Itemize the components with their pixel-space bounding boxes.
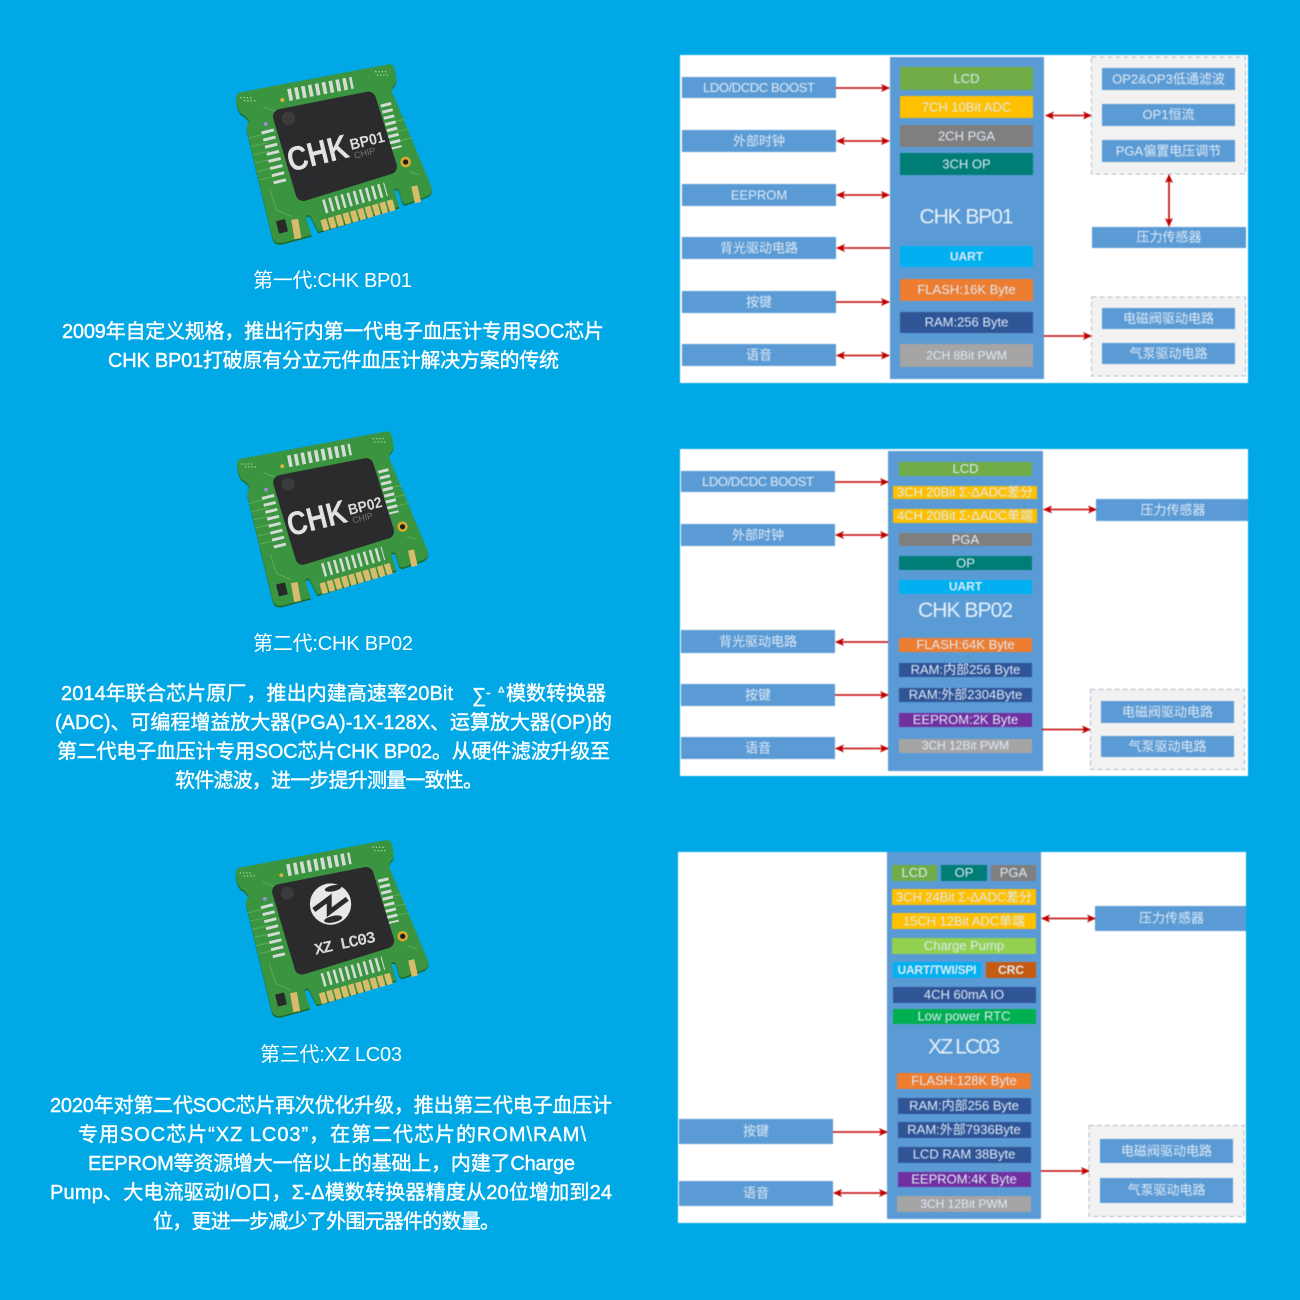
box: pump driver: 气泵驱动电路 — [1128, 739, 1207, 754]
box: pressure sensor — [1095, 906, 1246, 931]
box: valve driver — [1102, 308, 1235, 329]
block: EEPROM: EEPROM:4K Byte — [911, 1172, 1017, 1186]
block: LCD — [899, 461, 1032, 476]
box: pressure sensor — [1092, 227, 1246, 248]
left peripheral: external clock: 外部时钟 — [732, 528, 784, 542]
box: pump driver — [1102, 343, 1235, 364]
left peripheral: keys: 按键 — [746, 294, 772, 310]
icon: CHK BP02 chip — [237, 431, 428, 607]
left peripheral: LDO/DCDC BOOST: LDO/DCDC BOOST — [703, 80, 815, 95]
block: UART/TWI/SPI: UART/TWI/SPI — [898, 963, 976, 977]
text block: generation two description: ∑ — [472, 685, 486, 707]
heading: generation one: 第一代:CHK BP01 — [253, 269, 412, 292]
left peripheral: voice: 语音 — [743, 1186, 769, 1200]
heading: generation three: 第三代:XZ LC03 — [260, 1043, 402, 1066]
block: LCD — [900, 67, 1033, 90]
box: pump driver: 气泵驱动电路 — [1129, 346, 1208, 361]
left peripheral: backlight driver — [682, 237, 836, 259]
text block: generation three description: 2020年对第二代SOC芯片再次优化升级，推出第三代电子血压计 — [50, 1094, 612, 1117]
left peripheral: voice — [682, 344, 836, 366]
left peripheral: keys — [679, 1119, 833, 1144]
left peripheral: backlight driver: 背光驱动电路 — [719, 634, 797, 649]
box: pressure sensor — [1096, 499, 1248, 521]
box: pressure sensor: 压力传感器 — [1139, 910, 1204, 926]
block: PGA: 2CH PGA — [938, 128, 995, 144]
icon: CHK BP02 chip: CHIP — [351, 511, 374, 525]
left peripheral: EEPROM — [682, 184, 836, 206]
text block: generation one description: CHK BP01打破原有分立元件血压计解决方案的传统 — [108, 349, 559, 372]
box: valve driver: 电磁阀驱动电路 — [1122, 704, 1213, 720]
block: external RAM: RAM:外部7936Byte — [907, 1122, 1021, 1137]
chip name: CHK BP01 — [920, 206, 1014, 228]
box: valve driver — [1100, 1139, 1233, 1163]
left peripheral: keys: 按键 — [745, 688, 771, 702]
box: pressure sensor: 压力传感器 — [1140, 502, 1206, 518]
block: IO: 4CH 60mA IO — [924, 987, 1004, 1002]
diagram: XZ LC03 block diagram — [678, 852, 1246, 1223]
box: PGA bias: PGA偏置电压调节 — [1116, 144, 1221, 158]
left peripheral: keys — [681, 684, 835, 706]
box: pressure sensor: 压力传感器 — [1136, 230, 1202, 244]
arrows: left connections — [835, 482, 889, 748]
block: PWM — [900, 344, 1033, 367]
left peripheral: external clock — [682, 130, 836, 152]
block: LCD: LCD — [952, 461, 979, 476]
box: pump driver — [1101, 736, 1234, 757]
text block: generation two description: 2014年联合芯片原厂，推出内建高速率20Bit — [61, 682, 453, 705]
block: RAM: RAM:256 Byte — [925, 314, 1008, 330]
left peripheral: keys — [682, 291, 836, 313]
text block: generation two description: 软件滤波，进一步提升测量一致性。 — [175, 769, 483, 792]
chip name: XZ LC03 — [928, 1036, 1000, 1058]
panel: third generation — [50, 840, 1246, 1233]
left peripheral: backlight driver: 背光驱动电路 — [720, 240, 798, 256]
arrows: left connections — [836, 88, 890, 356]
block: UART: UART — [950, 250, 984, 264]
panel: second generation — [55, 431, 1248, 792]
block: charge pump: Charge Pump — [924, 938, 1004, 953]
icon: CHK BP01 chip: BP01 — [348, 129, 387, 154]
block: PGA — [899, 532, 1032, 547]
text block: generation two description — [55, 682, 612, 792]
group: actuators — [1089, 1126, 1244, 1216]
block: RTC — [893, 1008, 1036, 1024]
block: PWM: 3CH 12Bit PWM — [922, 738, 1009, 752]
block: differential ADC: 3CH 24Bit Σ-ΔADC差分 — [896, 890, 1032, 904]
block: PGA: PGA — [952, 532, 980, 547]
block: PWM — [899, 738, 1032, 753]
box: pump driver: 气泵驱动电路 — [1127, 1182, 1206, 1198]
panel: SoC core — [887, 852, 1041, 1219]
block: PWM: 3CH 12Bit PWM — [920, 1197, 1008, 1211]
block: OP: 3CH OP — [942, 156, 991, 172]
text block: generation one description: 2009年自定义规格，推出行内第一代电子血压计专用SOC芯片 — [62, 320, 604, 343]
block: single-ended ADC: 15CH 12Bit ADC单端 — [903, 914, 1025, 928]
left peripheral: LDO/DCDC BOOST — [681, 471, 835, 492]
icon: CHK BP01 chip: CHIP — [353, 146, 376, 161]
box: constant current: OP1恒流 — [1142, 107, 1195, 122]
arrows: right connections — [1041, 918, 1095, 1171]
block: LCD: LCD — [953, 71, 980, 86]
block: OP: OP — [956, 556, 975, 570]
left peripheral: voice — [679, 1181, 833, 1206]
block: PGA — [991, 865, 1036, 881]
block: LCD RAM: LCD RAM 38Byte — [913, 1146, 1015, 1162]
block: external RAM: RAM:外部2304Byte — [909, 687, 1022, 702]
box: PGA bias — [1102, 140, 1235, 162]
block: PGA — [900, 125, 1033, 147]
text block: generation two description: (ADC)、可编程增益放大器(PGA)-1X-128X、运算放大器(OP)的 — [55, 711, 612, 734]
block: PGA: PGA — [1000, 865, 1028, 880]
icon: CHK BP01 chip: CHK — [283, 128, 353, 180]
box: pump driver — [1100, 1178, 1233, 1203]
text block: generation three description: 位，更进一步减少了外围元器件的数量。 — [153, 1210, 500, 1233]
block: RAM — [900, 312, 1033, 333]
box: low-pass filter: OP2&OP3低通滤波 — [1112, 72, 1225, 86]
icon: CHK BP02 chip: CHK — [283, 494, 351, 544]
text block: generation three description: EEPROM等资源增大一倍以上的基础上，内建了Charge — [88, 1152, 575, 1175]
diagram: CHK BP01 block diagram — [680, 55, 1248, 383]
block: FLASH: FLASH:64K Byte — [916, 637, 1015, 652]
arrows: right connections — [1044, 116, 1169, 336]
group: actuators — [1090, 690, 1244, 770]
left peripheral: external clock — [681, 524, 835, 546]
block: RTC: Low power RTC — [918, 1008, 1010, 1024]
block: ADC: 7CH 10Bit ADC — [922, 100, 1011, 114]
icon: XZ LC03 chip: XZ LC03 — [313, 928, 378, 960]
left peripheral: keys: 按键 — [743, 1124, 769, 1138]
left peripheral: voice — [681, 737, 835, 759]
text block: generation three description: Pump、大电流驱动I/O口，Σ-Δ模数转换器精度从20位增加到24 — [50, 1181, 612, 1204]
block: differential ADC: 3CH 20Bit Σ-ΔADC差分 — [897, 484, 1033, 500]
group: analog front end — [1092, 57, 1246, 174]
block: EEPROM: EEPROM:2K Byte — [913, 712, 1018, 727]
block: OP: OP — [955, 865, 973, 880]
icon: CHK BP01 chip — [236, 64, 432, 245]
block: OP — [899, 556, 1032, 570]
left peripheral: LDO/DCDC BOOST — [682, 77, 836, 98]
panel: SoC core — [890, 57, 1044, 379]
block: UART: UART — [949, 580, 983, 594]
box: constant current — [1102, 104, 1235, 126]
group: actuators — [1092, 297, 1246, 376]
block: IO — [893, 987, 1036, 1003]
text block: generation two description: -ᐞ — [486, 684, 505, 700]
text block: generation two description: 模数转换器 — [506, 682, 606, 705]
block: CRC — [986, 962, 1036, 978]
left peripheral: LDO/DCDC BOOST: LDO/DCDC BOOST — [702, 474, 814, 489]
block: UART — [899, 580, 1032, 594]
left peripheral: voice: 语音 — [745, 740, 771, 756]
block: UART — [900, 246, 1033, 267]
text block: generation three description — [50, 1094, 612, 1233]
block: LCD: LCD — [901, 865, 928, 880]
diagram: CHK BP02 block diagram — [680, 449, 1248, 776]
heading: generation two: 第二代:CHK BP02 — [253, 632, 413, 655]
block: CRC: CRC — [998, 963, 1024, 977]
block: internal RAM: RAM:内部256 Byte — [911, 662, 1020, 677]
box: valve driver — [1101, 701, 1234, 723]
left peripheral: backlight driver — [681, 630, 835, 653]
block: FLASH: FLASH:16K Byte — [917, 282, 1016, 297]
block: single-ended ADC: 4CH 20Bit Σ-ΔADC单端 — [897, 508, 1033, 523]
icon: XZ LC03 chip — [236, 840, 428, 1018]
text block: generation two description: 第二代电子血压计专用SOC芯片CHK BP02。从硬件滤波升级至 — [57, 740, 610, 763]
text block: generation three description: 专用SOC芯片“XZ LC03”，在第二代芯片的ROM\RAM\ — [78, 1123, 586, 1146]
block: PWM — [897, 1196, 1031, 1212]
panel: first generation — [62, 55, 1248, 383]
text block: generation one description — [62, 320, 604, 372]
box: valve driver: 电磁阀驱动电路 — [1123, 311, 1214, 326]
arrows: left connections — [833, 1132, 887, 1193]
block: internal RAM: RAM:内部256 Byte — [909, 1098, 1019, 1113]
block: OP — [900, 153, 1033, 175]
left peripheral: EEPROM: EEPROM — [731, 188, 787, 202]
box: valve driver: 电磁阀驱动电路 — [1121, 1144, 1212, 1158]
chip name: CHK BP02 — [918, 599, 1013, 622]
panel: SoC core — [888, 451, 1043, 771]
arrows: right connections — [1042, 510, 1096, 730]
block: FLASH: FLASH:128K Byte — [911, 1073, 1017, 1088]
block: LCD — [892, 865, 937, 881]
box: low-pass filter — [1102, 68, 1235, 90]
left peripheral: external clock: 外部时钟 — [733, 134, 785, 148]
block: FLASH — [900, 279, 1033, 301]
block: ADC — [900, 96, 1033, 118]
block: charge pump — [892, 938, 1036, 954]
block: PWM: 2CH 8Bit PWM — [926, 348, 1007, 362]
block: OP — [941, 865, 987, 881]
left peripheral: voice: 语音 — [746, 348, 772, 362]
icon: CHK BP02 chip: BP02 — [346, 494, 384, 519]
